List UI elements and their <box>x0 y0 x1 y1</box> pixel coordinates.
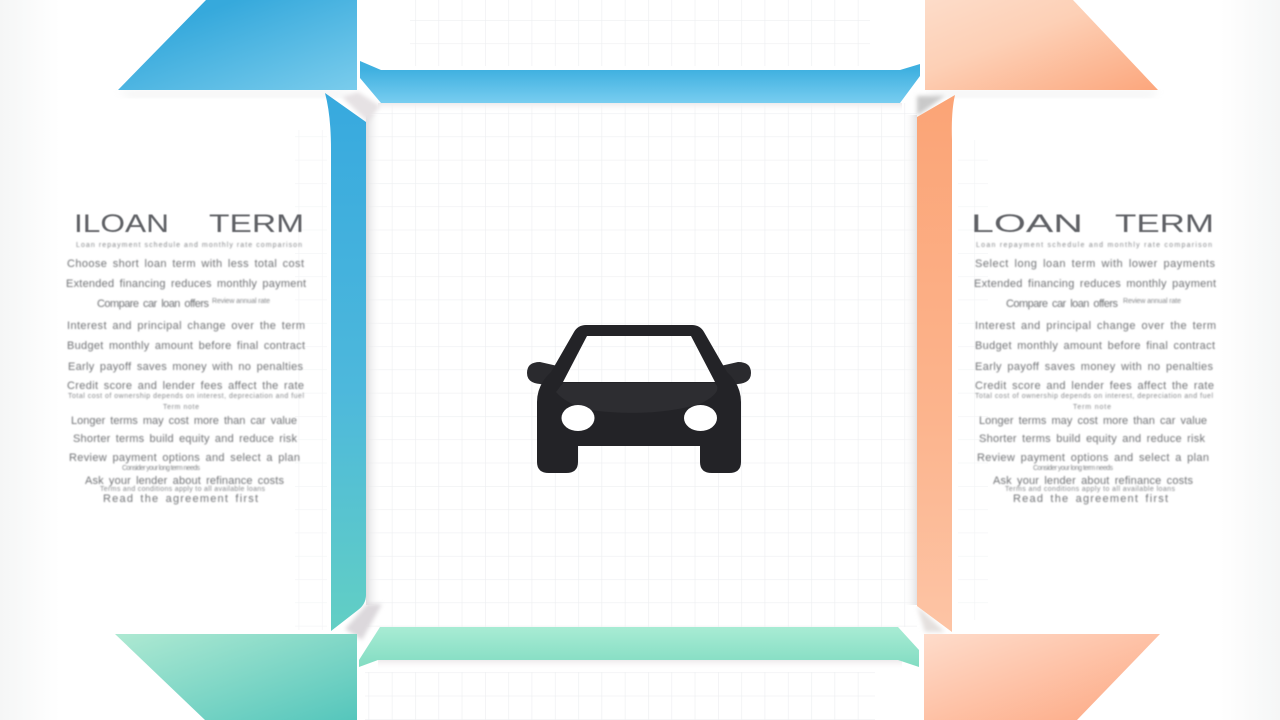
body copy: right: Loan repayment schedule and monthly rate comparison <box>976 242 1212 249</box>
body copy: right: Early payoff saves money with no penalties <box>975 361 1214 373</box>
body copy: left: Consider your long term needs <box>122 465 200 472</box>
car right headlight <box>684 405 717 431</box>
body copy: right: Review annual rate <box>1123 298 1181 305</box>
corner folds <box>342 92 945 640</box>
body copy: right: Total cost of ownership depends on interest, depreciation and fuel <box>975 393 1213 400</box>
body copy: left: Budget monthly amount before final contract <box>67 340 305 352</box>
frame bar: bottom green <box>359 627 919 667</box>
body copy: right: Interest and principal change over the term <box>975 320 1216 332</box>
body copy: left: Shorter terms build equity and reduce risk <box>73 433 298 445</box>
body copy: left: Longer terms may cost more than car value <box>71 415 297 427</box>
car body <box>537 325 741 473</box>
body copy: left: Ask your lender about refinance costs <box>85 475 284 487</box>
grid: left panel strip <box>295 130 327 630</box>
body copy: right: Extended financing reduces monthly payment <box>974 278 1216 290</box>
body copy: left: Read the agreement first <box>103 493 258 505</box>
car mirrors <box>527 362 562 388</box>
body copy: right: Terms and conditions apply to all available loans <box>1005 486 1176 493</box>
body copy: left: Loan repayment schedule and monthly rate comparison <box>76 242 302 249</box>
corner: bottom right orange <box>924 634 1160 720</box>
frame bar: top blue <box>360 61 920 103</box>
body copy: left <box>66 242 306 505</box>
body copy: right: Consider your long term needs <box>1033 465 1114 472</box>
grid: bottom strip <box>365 672 875 720</box>
body copy: left: Choose short loan term with less total cost <box>67 258 304 270</box>
car left headlight <box>562 405 594 431</box>
body copy: left: Compare car loan offers <box>97 298 210 310</box>
body copy: left: Extended financing reduces monthly payment <box>66 278 306 290</box>
body copy: left: Review annual rate <box>212 298 270 305</box>
heading: right loan term: LOAN <box>971 210 1083 238</box>
heading: left loan term: ILOAN <box>74 210 169 238</box>
body copy: right: Compare car loan offers <box>1006 298 1118 310</box>
body copy: right: Select long loan term with lower payments <box>975 258 1216 270</box>
body copy: left: Terms and conditions apply to all available loans <box>100 486 266 493</box>
car hood highlight <box>556 383 717 413</box>
corner: top left blue <box>118 0 357 90</box>
heading: left loan term: TERM <box>209 210 304 238</box>
body copy: right: Read the agreement first <box>1013 493 1168 505</box>
body copy: right: Term note <box>1073 404 1111 411</box>
body copy: right: Ask your lender about refinance costs <box>993 475 1194 487</box>
body copy: left: Term note <box>163 404 199 411</box>
body copy: right: Credit score and lender fees affect the rate <box>975 380 1214 392</box>
grid: center panel <box>366 103 917 627</box>
body copy: right: Shorter terms build equity and reduce risk <box>979 433 1206 445</box>
corner: top right orange <box>925 0 1158 90</box>
heading: right loan term: TERM <box>1115 210 1214 238</box>
grid: right panel strip <box>958 140 988 620</box>
body copy: left: Review payment options and select a plan <box>69 452 300 464</box>
body copy: left: Total cost of ownership depends on interest, depreciation and fuel <box>68 393 304 400</box>
center panel inner shadows <box>116 91 1160 670</box>
body copy: left: Interest and principal change over the term <box>67 320 305 332</box>
body copy: left: Credit score and lender fees affect the rate <box>67 380 304 392</box>
body copy: right: Budget monthly amount before final contract <box>975 340 1215 352</box>
corner: bottom left green <box>115 634 357 720</box>
grid: top strip <box>410 0 870 66</box>
body copy: left: Early payoff saves money with no penalties <box>68 361 304 373</box>
heading: left loan term <box>74 210 304 238</box>
icon: car <box>527 325 751 473</box>
heading: right loan term <box>971 210 1214 238</box>
body copy: right: Review payment options and select a plan <box>977 452 1209 464</box>
frame bar: right orange <box>917 95 955 632</box>
frame bar: left blue-green <box>325 93 366 631</box>
body copy: right <box>974 242 1216 505</box>
text block: left <box>66 210 306 505</box>
text block: right <box>971 210 1216 505</box>
body copy: right: Longer terms may cost more than car value <box>979 415 1207 427</box>
